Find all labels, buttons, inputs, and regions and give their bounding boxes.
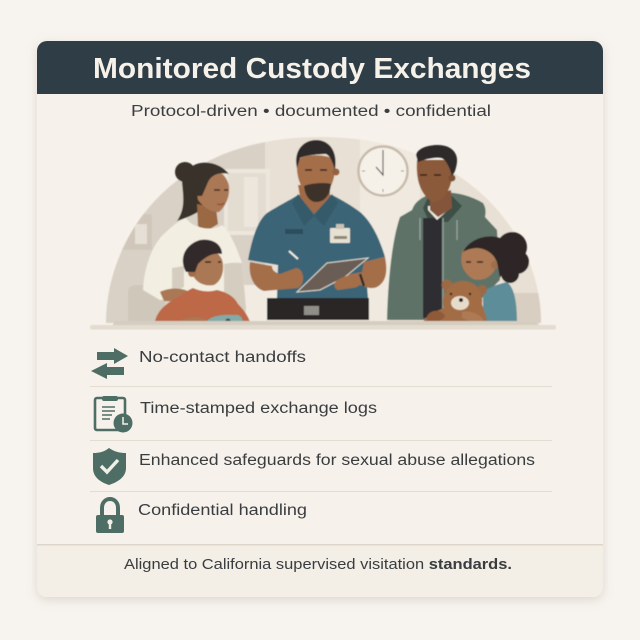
row: time-stamped logs [95, 396, 377, 432]
icon: shield with check [93, 448, 126, 485]
row: confidential handling: Confidential handling [138, 502, 307, 519]
footer note: Aligned to California supervised visitation standards. [124, 557, 512, 573]
row: no-contact handoffs [91, 348, 306, 379]
infographic canvas [34, 41, 606, 603]
icon: padlock [96, 499, 124, 533]
panel: card [37, 41, 603, 597]
boy with toy car [155, 240, 250, 324]
illustration: family and monitor [90, 130, 556, 330]
row: time-stamped logs: Time-stamped exchange logs [140, 400, 377, 417]
list: features [90, 348, 552, 533]
woman [143, 162, 246, 322]
teddy bear [423, 280, 487, 323]
row: confidential handling [96, 499, 307, 533]
clipboard [297, 258, 368, 292]
subtitle: Protocol-driven • documented • confidential [131, 103, 491, 120]
header band [37, 41, 603, 94]
row: enhanced safeguards [93, 448, 535, 485]
wall clock [358, 146, 408, 196]
man in green hoodie [387, 145, 500, 320]
footer band [37, 545, 603, 597]
title: Monitored Custody Exchanges [93, 53, 531, 85]
girl with teddy bear [423, 232, 529, 323]
icon: clipboard with clock [95, 396, 132, 432]
chair [128, 285, 165, 322]
officer [248, 140, 386, 320]
icon: swap arrows [91, 348, 128, 379]
table ledge [90, 321, 556, 330]
row: no-contact handoffs: No-contact handoffs [139, 349, 306, 366]
row: enhanced safeguards: Enhanced safeguards for sexual abuse allegations [139, 452, 535, 469]
background arch [100, 130, 550, 330]
